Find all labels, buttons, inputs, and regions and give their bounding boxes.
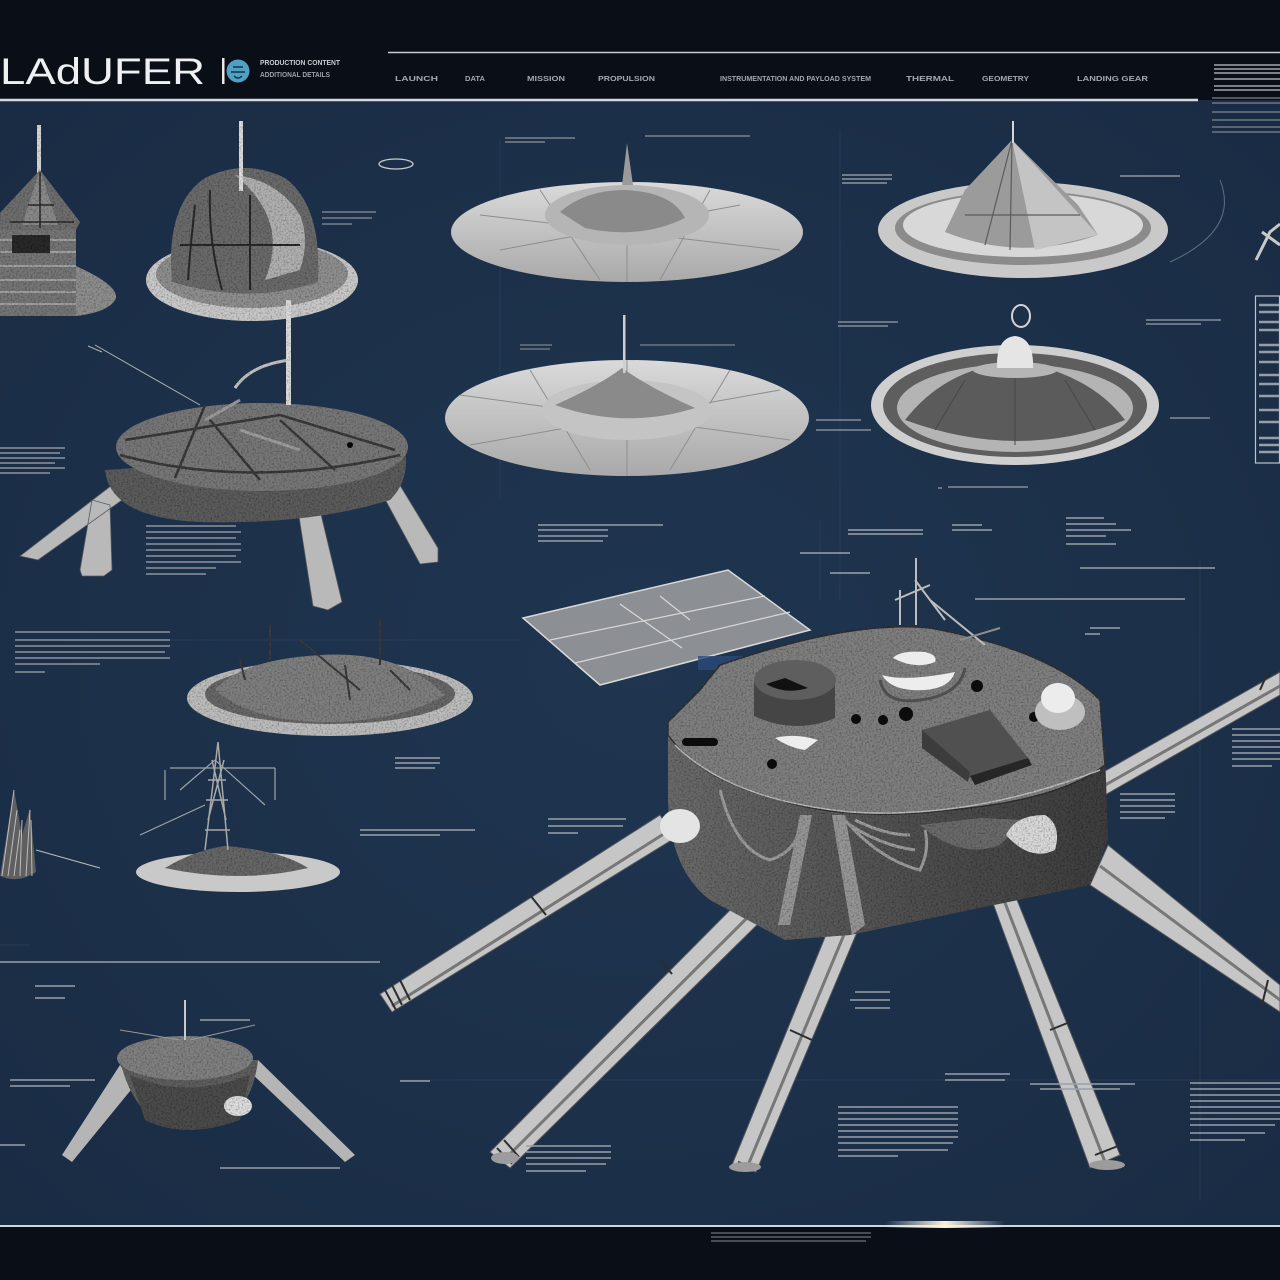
header nav labels: MISSION bbox=[527, 76, 565, 83]
ring around hatches bbox=[880, 668, 965, 701]
text block: centre top bbox=[538, 525, 663, 541]
figure: dome module bbox=[146, 121, 358, 321]
header bar bbox=[0, 51, 1280, 132]
deck holes bbox=[682, 680, 1039, 769]
main lander legs bbox=[380, 672, 1280, 1172]
text block: left column A bbox=[0, 448, 65, 473]
text block: lower centre bbox=[838, 1107, 958, 1156]
white hatches bbox=[775, 652, 955, 750]
figure: flat disc top centre bbox=[451, 143, 803, 282]
header small text: PRODUCTION CONTENT bbox=[260, 60, 341, 67]
figure: spire left bbox=[0, 790, 100, 879]
header nav labels bbox=[395, 76, 1148, 83]
disc label lines bbox=[505, 136, 750, 142]
small lander legs bbox=[62, 1060, 355, 1162]
figure: flat disc centre bbox=[445, 315, 809, 476]
body drapery bbox=[720, 790, 927, 870]
partial strut top right bbox=[1256, 224, 1280, 260]
text block: left column B bbox=[146, 526, 241, 574]
header nav labels: PROPULSION bbox=[598, 76, 655, 83]
cone label lines bbox=[842, 175, 1180, 183]
figure: small lander bottom left bbox=[62, 1000, 355, 1162]
dish label lines bbox=[816, 320, 1221, 488]
header nav labels: DATA bbox=[465, 76, 485, 83]
title wordmark: LAdUFER bbox=[0, 51, 205, 92]
antenna mast cluster bbox=[895, 558, 1000, 645]
footer highlight glow bbox=[885, 1221, 1005, 1228]
header nav labels: INSTRUMENTATION AND PAYLOAD SYSTEM bbox=[720, 76, 871, 83]
figure: large lander upper left bbox=[20, 300, 438, 610]
figure: main lander bbox=[380, 558, 1280, 1172]
figure: cone on disc bbox=[878, 121, 1224, 278]
solar panel bbox=[523, 570, 810, 685]
dome module callout lines bbox=[322, 212, 376, 224]
white sphere tank bbox=[1035, 683, 1085, 730]
centre disc label lines bbox=[520, 345, 735, 349]
joint sphere bbox=[660, 809, 700, 843]
icon: round logo badge bbox=[222, 58, 250, 84]
header nav labels: LAUNCH bbox=[395, 76, 438, 83]
vertical data table right bbox=[1256, 296, 1280, 463]
dark cylinder on deck bbox=[754, 660, 836, 726]
dark box panel on deck bbox=[922, 710, 1032, 785]
text block: callouts around main lander bbox=[0, 518, 1280, 1168]
footer bar bbox=[0, 1221, 1280, 1241]
header side data table bbox=[1212, 65, 1280, 132]
header nav labels: THERMAL bbox=[906, 76, 955, 83]
header nav labels: GEOMETRY bbox=[982, 76, 1029, 83]
main lander deck bbox=[668, 627, 1105, 814]
figure: dark cone dish bbox=[871, 305, 1159, 465]
text block: left column C bbox=[15, 632, 170, 672]
lander callouts bbox=[88, 345, 200, 405]
leg shading and foot details bbox=[392, 686, 1280, 1170]
text block: lower left of legs bbox=[526, 1146, 611, 1171]
main lander body bbox=[668, 722, 1108, 940]
header small text bbox=[260, 60, 341, 79]
foot pads bbox=[491, 1152, 1125, 1172]
footer text strip bbox=[711, 1233, 871, 1241]
small ellipse glyph bbox=[379, 159, 413, 169]
figure: hut module top left bbox=[0, 125, 116, 316]
figure: wide disc with machinery bbox=[187, 620, 473, 736]
figure: tower on disc bbox=[136, 742, 340, 892]
header small text: ADDITIONAL DETAILS bbox=[260, 72, 330, 79]
upper lander legs bbox=[20, 482, 438, 610]
header nav labels: LANDING GEAR bbox=[1077, 76, 1148, 83]
